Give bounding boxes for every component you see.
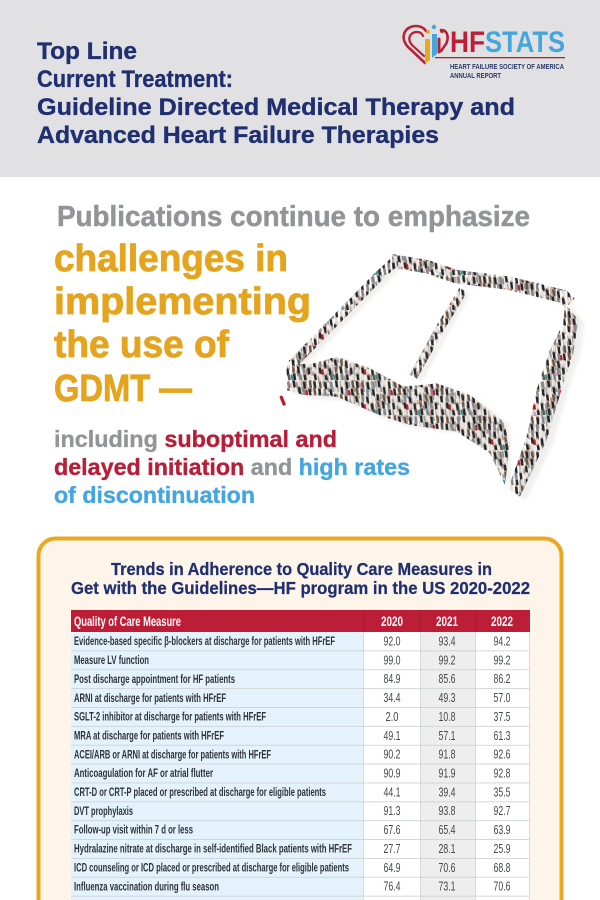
supporting statement: of discontinuation — [54, 482, 255, 508]
row: MRA — [74, 729, 511, 743]
crowd: lone figure at tip — [281, 397, 284, 404]
row: ACEI/ARB: 92.6 — [494, 748, 511, 762]
title: Current Treatment: — [37, 66, 233, 93]
table header: 2021 — [436, 613, 458, 629]
supporting statement: including suboptimal and — [54, 426, 337, 452]
header band — [0, 0, 600, 177]
row: ACEI/ARB: 90.2 — [384, 748, 401, 762]
row: anticoagulation — [74, 766, 511, 780]
row: DVT — [74, 804, 511, 818]
logo subtitle — [450, 62, 565, 80]
gold statement: challenges in — [54, 238, 288, 280]
row: SGLT-2 — [74, 710, 511, 724]
crowd: top edge — [392, 261, 570, 303]
logo wordmark: STATS — [485, 26, 565, 59]
row: follow-up: Follow-up visit within 7 d or less — [74, 825, 193, 837]
table header: 2022 — [491, 613, 513, 629]
row: ICD: 64.9 — [384, 861, 401, 875]
row: ARNI: 34.4 — [384, 691, 401, 705]
row: ARNI: ARNI at discharge for patients with HFrEF — [74, 693, 226, 705]
gold statement: implementing — [54, 281, 311, 323]
row: post discharge appointment: 84.9 — [384, 672, 401, 686]
crowd: book spine — [413, 290, 463, 377]
row: MRA: 57.1 — [438, 729, 456, 743]
row: ACEI/ARB: ACEI/ARB or ARNI at discharge for patients with HFrEF — [74, 749, 271, 761]
row: MRA: MRA at discharge for patients with HFrEF — [74, 730, 224, 742]
row: LV function: 99.2 — [494, 653, 511, 667]
row: hydralazine: 28.1 — [438, 842, 456, 856]
logo subtitle: ANNUAL REPORT — [450, 71, 501, 80]
row: beta-blockers: 92.0 — [384, 634, 401, 648]
table header — [71, 610, 530, 632]
row: influenza: 76.4 — [384, 880, 401, 894]
row: hydralazine: 27.7 — [384, 842, 401, 856]
row: beta-blockers: Evidence-based specific β-blockers at discharge for patients with HFrEF — [74, 636, 335, 648]
row: SGLT-2: 10.8 — [438, 710, 456, 724]
row: ARNI — [74, 691, 511, 705]
row: CRT: 39.4 — [438, 785, 456, 799]
title: Advanced Heart Failure Therapies — [37, 122, 439, 149]
row: post discharge appointment: 85.6 — [438, 672, 456, 686]
row: anticoagulation: 92.8 — [494, 766, 511, 780]
row: follow-up: 67.6 — [384, 823, 401, 837]
row: LV function: Measure LV function — [74, 655, 149, 667]
row: ICD: 68.8 — [494, 861, 511, 875]
row: post discharge appointment: 86.2 — [494, 672, 511, 686]
row: anticoagulation: 91.9 — [438, 766, 456, 780]
row: hydralazine: 25.9 — [494, 842, 511, 856]
row: ARNI: 49.3 — [438, 691, 456, 705]
row: hydralazine: Hydralazine nitrate at discharge in self-identified Black patients with HFrEF — [74, 844, 352, 856]
crowd: lower page band — [287, 357, 510, 485]
row: ICD: ICD counseling or ICD placed or prescribed at discharge for eligible patients — [74, 862, 349, 874]
row: CRT: CRT-D or CRT-P placed or prescribed at discharge for eligible patients — [74, 787, 326, 799]
row: influenza: Influenza vaccination during flu season — [74, 881, 219, 893]
row: post discharge appointment: Post discharge appointment for HF patients — [74, 674, 235, 686]
row: ACEI/ARB: 91.8 — [438, 748, 456, 762]
logo subtitle: HEART FAILURE SOCIETY OF AMERICA — [450, 62, 565, 71]
row: post discharge appointment — [74, 672, 511, 686]
logo wordmark — [450, 26, 565, 59]
panel heading — [71, 559, 530, 598]
row: SGLT-2: SGLT-2 inhibitor at discharge for patients with HFrEF — [74, 712, 266, 724]
supporting statement: delayed initiation and high rates — [54, 454, 410, 480]
row: CRT: 35.5 — [494, 785, 511, 799]
row: follow-up — [74, 823, 511, 837]
gold statement — [54, 238, 311, 410]
row: LV function — [74, 653, 511, 667]
panel: quality care measures — [38, 538, 562, 900]
row: LV function: 99.2 — [438, 653, 456, 667]
row: beta-blockers: 93.4 — [438, 634, 456, 648]
row: SGLT-2: 37.5 — [494, 710, 511, 724]
table — [71, 610, 530, 900]
row: influenza — [74, 880, 511, 894]
row: DVT: 92.7 — [494, 804, 511, 818]
row: CRT: 44.1 — [384, 785, 401, 799]
logo wordmark: HF — [450, 26, 485, 59]
supporting statement — [54, 426, 410, 508]
intro heading: Publications continue to emphasize — [57, 201, 530, 233]
title: Top Line — [37, 38, 137, 65]
table header: 2020 — [381, 613, 403, 629]
row: MRA: 61.3 — [494, 729, 511, 743]
row: influenza: 70.6 — [494, 880, 511, 894]
row: beta-blockers: 94.2 — [494, 634, 511, 648]
logo: HFSTATS — [404, 25, 565, 80]
panel heading: Trends in Adherence to Quality Care Measures in — [111, 559, 492, 579]
table column fills — [71, 632, 530, 900]
illustration: crowd forming open book — [281, 258, 584, 500]
title: Guideline Directed Medical Therapy and — [37, 94, 515, 121]
icon: heart with figures — [404, 25, 448, 64]
row: follow-up: 65.4 — [438, 823, 456, 837]
row: anticoagulation: Anticoagulation for AF or atrial flutter — [74, 768, 213, 780]
row: follow-up: 63.9 — [494, 823, 511, 837]
crowd: left page edge — [292, 258, 398, 365]
row: SGLT-2: 2.0 — [386, 710, 399, 724]
panel heading: Get with the Guidelines—HF program in the US 2020-2022 — [71, 578, 530, 598]
title — [37, 38, 515, 149]
row: DVT: 91.3 — [384, 804, 401, 818]
table header: Quality of Care Measure — [74, 613, 181, 629]
row: ARNI: 57.0 — [494, 691, 511, 705]
gold statement: the use of — [54, 324, 229, 366]
crowd shadows — [293, 260, 584, 500]
row: LV function: 99.0 — [384, 653, 401, 667]
crowd: right page band — [508, 303, 578, 497]
row: anticoagulation: 90.9 — [384, 766, 401, 780]
row: DVT: DVT prophylaxis — [74, 806, 133, 818]
row: ACEI/ARB — [74, 748, 511, 762]
row: ICD: 70.6 — [438, 861, 456, 875]
row: DVT: 93.8 — [438, 804, 456, 818]
gold statement: GDMT — — [54, 368, 192, 410]
row: MRA: 49.1 — [384, 729, 401, 743]
row: influenza: 73.1 — [438, 880, 456, 894]
